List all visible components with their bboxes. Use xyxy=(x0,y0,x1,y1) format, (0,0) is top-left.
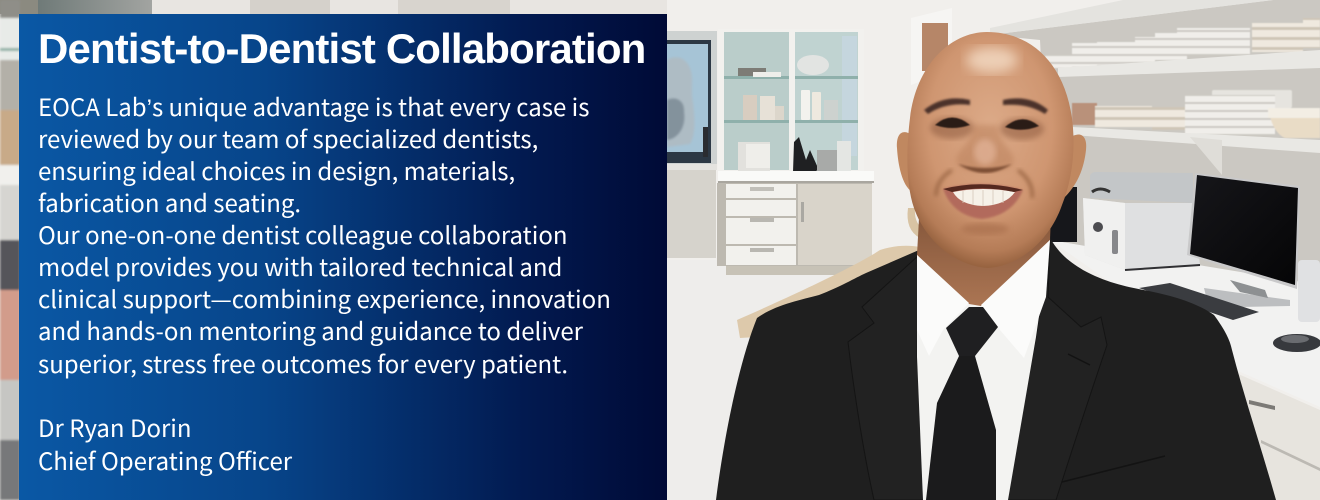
chest pocket xyxy=(1062,354,1165,482)
lapels xyxy=(848,255,925,500)
left edge: shelves and lab items xyxy=(0,0,20,500)
text block: second paragraph: model provides you with tailored technical and xyxy=(38,248,562,283)
dental chair xyxy=(737,208,922,338)
white shirt xyxy=(917,240,1050,500)
suit jacket xyxy=(716,238,1276,500)
shelf objects xyxy=(738,68,766,76)
teeth xyxy=(953,189,1015,206)
text block: second paragraph: clinical support—combining experience, innovation xyxy=(38,280,611,315)
text block: second paragraph: and hands-on mentoring and guidance to deliver xyxy=(38,312,583,347)
text block: first paragraph: reviewed by our team of specialized dentists, xyxy=(38,120,538,155)
heading: Dentist-to-Dentist Collaboration xyxy=(38,25,645,72)
necktie xyxy=(926,356,996,500)
models row 1 xyxy=(1045,18,1320,68)
smile lines xyxy=(936,170,1032,198)
printer xyxy=(1083,172,1200,270)
glass display cabinet xyxy=(718,29,864,174)
panel: blue gradient text panel xyxy=(19,14,667,500)
tooth gaps xyxy=(963,190,1003,206)
text block: second paragraph xyxy=(38,216,611,380)
glass shelves xyxy=(724,76,789,79)
text block: signature: Dr Ryan Dorin xyxy=(38,409,192,444)
nose underside xyxy=(958,164,1012,173)
desk and drawers xyxy=(1050,240,1320,500)
person: Dr Ryan Dorin xyxy=(716,32,1276,500)
forehead highlight xyxy=(966,47,1018,73)
wall shelves with dental models xyxy=(990,0,1320,290)
head xyxy=(907,32,1074,268)
eyebrows xyxy=(924,98,970,114)
door xyxy=(911,8,952,85)
base cabinet with drawers xyxy=(717,171,874,275)
neck xyxy=(917,190,1052,306)
text block: first paragraph xyxy=(38,88,589,219)
text block: second paragraph: superior, stress free outcomes for every patient. xyxy=(38,345,568,380)
shelf 2 xyxy=(1072,127,1320,153)
nose shading xyxy=(956,125,1014,172)
lips xyxy=(943,184,1023,219)
text block: signature: Chief Operating Officer xyxy=(38,442,292,477)
ears xyxy=(897,132,912,192)
text block: signature xyxy=(38,409,292,477)
text block: first paragraph: EOCA Lab’s unique advantage is that every case is xyxy=(38,88,589,123)
eye sockets xyxy=(930,117,974,139)
text block: second paragraph: Our one-on-one dentist colleague collaboration xyxy=(38,216,568,251)
chin shadow xyxy=(961,223,1009,235)
small monitor behind head xyxy=(1050,187,1077,242)
keyboard and mouse xyxy=(1139,283,1320,352)
models row 2 xyxy=(1072,90,1320,138)
cup xyxy=(1298,260,1320,322)
eyes xyxy=(935,118,970,128)
X-ray light display xyxy=(667,31,717,258)
text block: first paragraph: fabrication and seating. xyxy=(38,184,301,219)
collar xyxy=(917,255,969,356)
shelf 1 xyxy=(1058,50,1320,77)
text block: first paragraph: ensuring ideal choices in design, materials, xyxy=(38,152,515,187)
mouth shadow xyxy=(943,184,1023,192)
computer monitor xyxy=(1187,173,1300,307)
